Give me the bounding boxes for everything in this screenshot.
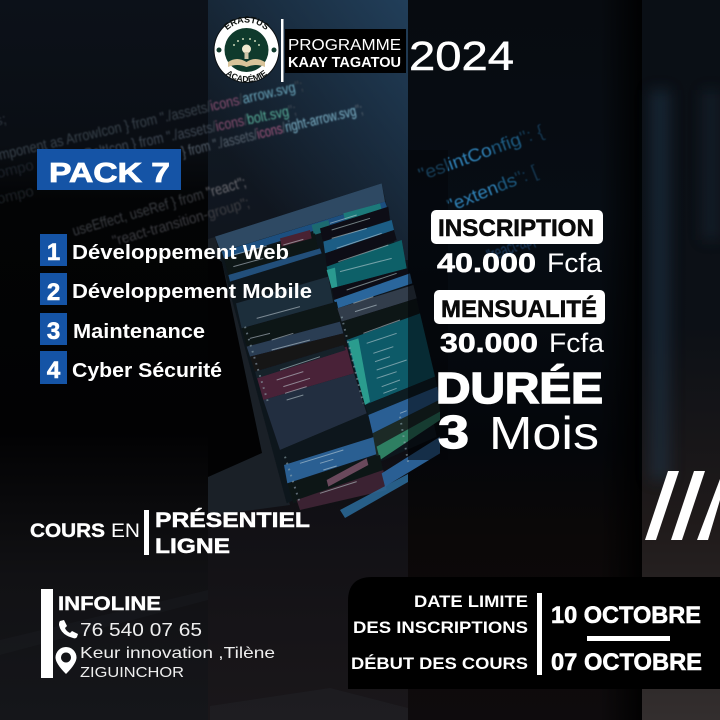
course 3: 3 xyxy=(47,318,60,345)
duration xyxy=(436,363,603,459)
contact block xyxy=(41,589,275,681)
decorative slashes xyxy=(645,471,720,540)
background: blurred code lines: } from "./assets/icons/right-arrow.svg"; xyxy=(180,101,365,161)
heading: Pack 7 xyxy=(37,149,181,190)
background: blurred code lines: "react-transition-group"; xyxy=(110,194,252,250)
dark band over screen right side xyxy=(408,150,448,460)
course 1: Développement Web xyxy=(72,242,289,264)
course mode: PRÉSENTIEL xyxy=(155,509,310,532)
background: second monitor bezel xyxy=(208,237,290,516)
course mode: LIGNE xyxy=(155,535,230,558)
background: eslint code text: "react-app", xyxy=(484,225,547,266)
background: blurred code lines: BoltIcon } from "./assets/icons/bolt.svg"; xyxy=(83,101,298,163)
background: eslint code text: "extends": [ xyxy=(444,161,541,216)
panel: dates xyxy=(348,577,720,689)
logo: Erastus Académie: ACADÉMIE xyxy=(226,70,267,82)
background: eslint code text xyxy=(416,121,547,266)
course 2: 2 xyxy=(47,279,60,306)
course list xyxy=(40,234,312,384)
logo divider xyxy=(281,19,284,82)
course 4 xyxy=(40,351,222,384)
course 1: 1 xyxy=(47,239,60,266)
background: code editor screen xyxy=(215,183,440,510)
logo: Erastus Académie xyxy=(214,16,280,83)
panel: dates: 07 OCTOBRE xyxy=(551,649,702,676)
background: blurred code lines xyxy=(0,77,365,250)
price: mensualité xyxy=(434,290,605,358)
contact block: Keur innovation ,Tilène xyxy=(80,645,275,662)
duration: 3 xyxy=(438,406,469,458)
panel: dates: 10 OCTOBRE xyxy=(551,602,701,629)
course 3 xyxy=(40,313,205,345)
price: inscription: 40.000 xyxy=(437,248,536,278)
logo: Erastus Académie: ERASTUS xyxy=(224,16,269,30)
programme name box: KAAY TAGATOU xyxy=(288,55,401,71)
course 1 xyxy=(40,234,289,266)
course mode xyxy=(30,509,310,558)
course 3: Maintenance xyxy=(73,321,205,343)
heading: Pack 7: PACK 7 xyxy=(49,157,170,188)
background: blurred code lines: useEffect, useRef } from "react"; xyxy=(70,174,248,240)
price: inscription: INSCRIPTION xyxy=(438,215,594,242)
icon: location pin xyxy=(56,647,76,674)
duration: Mois xyxy=(489,407,599,459)
course 2: Développement Mobile xyxy=(72,281,312,303)
background: blue highlight at screen lower corner xyxy=(340,474,408,518)
background: eslint code text: "eslintConfig": { xyxy=(416,121,546,185)
price: inscription: Fcfa xyxy=(547,248,603,278)
price: mensualité: MENSUALITÉ xyxy=(441,295,597,323)
price: inscription xyxy=(431,210,603,278)
background: blurred code lines: mponent as ArrowIcon } from "./assets/icons/arrow.svg"; xyxy=(0,77,305,164)
programme name box: PROGRAMME xyxy=(288,37,401,54)
price: mensualité: 30.000 xyxy=(440,328,538,358)
programme name box xyxy=(285,29,406,73)
course 4: Cyber Sécurité xyxy=(72,360,222,382)
course mode: EN xyxy=(111,521,140,542)
price: mensualité: Fcfa xyxy=(549,328,605,358)
duration: DURÉE xyxy=(436,363,603,413)
panel: dates: DATE LIMITE xyxy=(414,592,528,611)
course 2 xyxy=(40,273,312,306)
contact block: ZIGUINCHOR xyxy=(80,664,184,681)
icon: phone xyxy=(59,620,78,638)
year: 2024 xyxy=(409,33,514,79)
course 4: 4 xyxy=(47,357,61,384)
panel: dates: DES INSCRIPTIONS xyxy=(353,618,528,637)
panel: dates: DÉBUT DES COURS xyxy=(351,654,528,673)
contact block: INFOLINE xyxy=(58,594,161,615)
contact block: 76 540 07 65 xyxy=(80,620,202,640)
course mode: COURS xyxy=(30,521,105,542)
